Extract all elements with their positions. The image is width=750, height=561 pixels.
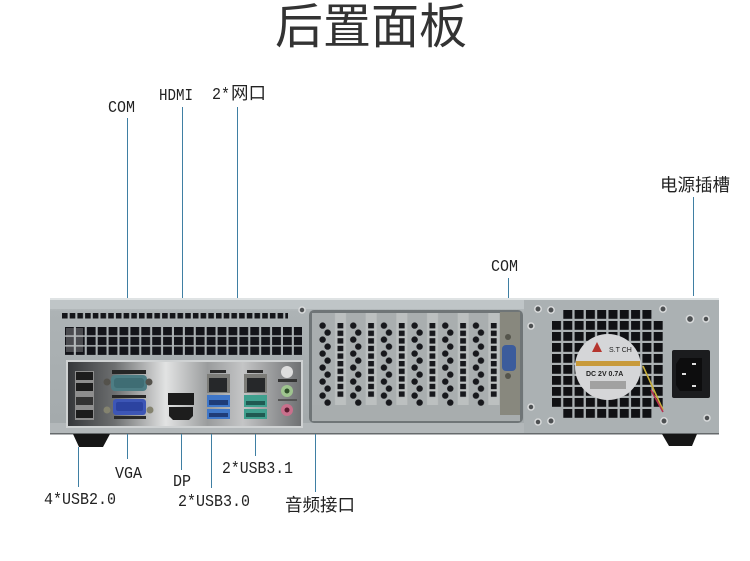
title: 后置面板 (275, 1, 467, 54)
io shield (66, 360, 303, 428)
rj45 left (207, 370, 230, 393)
screws (299, 306, 710, 425)
callout: HDMI: HDMI (159, 87, 193, 106)
pci slot bay (309, 310, 523, 423)
callout: power socket: 电源插槽 (660, 175, 730, 195)
chassis (50, 298, 719, 447)
callout: VGA (115, 434, 143, 484)
callout: 2 network ports: 网口 (231, 83, 266, 103)
fan grille (552, 310, 663, 420)
hdmi port (169, 407, 193, 420)
rj45 right (244, 370, 267, 393)
callout: VGA: VGA (115, 465, 143, 484)
callout: COM right (491, 258, 518, 298)
callout: 2 USB 3.1 (222, 434, 293, 479)
usb 3.0 pair (207, 395, 230, 419)
dp port (168, 393, 194, 405)
callout: audio port (285, 434, 355, 515)
usb 3.1 pair (244, 395, 267, 419)
left small vent detail (66, 328, 83, 352)
power supply (299, 300, 719, 433)
perforated slot circles (319, 322, 503, 406)
vga port (104, 395, 154, 419)
callout: 2 USB 3.1: 2*USB3.1 (222, 460, 293, 479)
com port (104, 370, 152, 391)
fan wires (643, 366, 663, 410)
callout: DP (173, 434, 191, 492)
audio jacks (278, 366, 297, 416)
callout: 2 network ports: 2* (212, 86, 230, 105)
callout: 2 USB 3.0: 2*USB3.0 (178, 493, 250, 512)
com bracket (500, 312, 520, 415)
main vent grid (65, 327, 302, 355)
callout: 4 USB 2.0: 4*USB2.0 (44, 491, 116, 510)
callout: COM left: COM (108, 99, 135, 118)
foot: left (73, 434, 110, 447)
top vent row (62, 313, 288, 318)
fan sticker (575, 334, 641, 400)
callout: 2 network ports (212, 83, 266, 298)
power socket (672, 350, 710, 398)
fan sticker: S.T CH (609, 347, 632, 354)
foot: right (662, 434, 697, 446)
callout: 4 USB 2.0 (44, 447, 116, 510)
callout: DP: DP (173, 473, 191, 492)
perforated slot squares (338, 323, 498, 398)
callout: power socket (660, 175, 730, 296)
callout: COM right: COM (491, 258, 518, 277)
fan sticker: DC 2V 0.7A (586, 371, 623, 378)
callout: audio port: 音频接口 (285, 495, 355, 515)
callout: 2 USB 3.0 (178, 434, 250, 512)
usb 2.0 stack (75, 371, 94, 420)
